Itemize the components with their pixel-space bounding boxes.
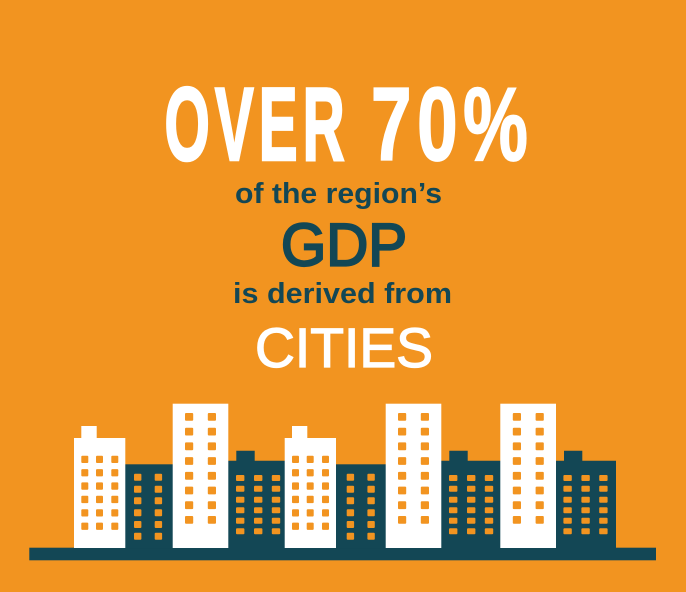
dark building 4 — [441, 451, 501, 548]
ground strip — [29, 548, 656, 560]
dark building 5 — [556, 451, 616, 548]
white tall building 2 — [386, 404, 441, 548]
white building 1 — [74, 426, 125, 548]
text: is derived from: is derived from — [233, 278, 452, 310]
white building 2 — [285, 426, 336, 548]
headline: over 70%: 70% — [371, 67, 533, 183]
white tall building 1 — [173, 404, 228, 548]
dark building 2 — [228, 451, 285, 548]
city skyline illustration — [29, 404, 656, 560]
text: CITIES: CITIES — [255, 316, 433, 379]
text: GDP: GDP — [281, 212, 407, 278]
headline: over 70%: OVER — [164, 66, 350, 182]
dark building 3 — [336, 464, 386, 548]
headline: over 70% — [164, 66, 533, 183]
dark building 1 — [125, 464, 173, 548]
white tall building 3 — [500, 404, 556, 548]
text: of the region's: of the region’s — [235, 178, 442, 210]
